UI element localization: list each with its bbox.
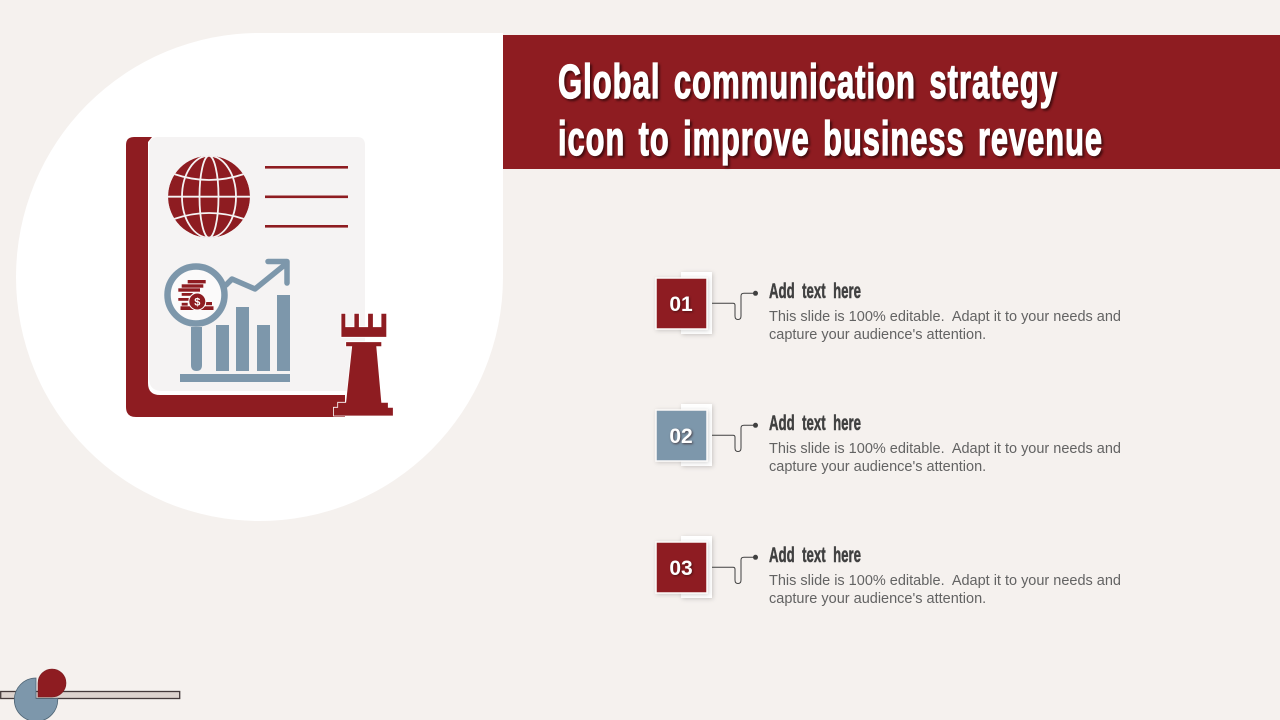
text 01: Add text here: [769, 280, 861, 303]
list item 01: [656, 272, 1121, 343]
number badge 02: 02: [669, 425, 693, 448]
number badge 03: [656, 536, 712, 598]
list item 03: [656, 536, 1121, 607]
text 02: [769, 412, 1121, 475]
connector 02: [712, 423, 758, 452]
text 01: This slide is 100% editable. Adapt it to your needs and: [769, 309, 1121, 325]
text 02: capture your audience's attention.: [769, 459, 986, 475]
text 03: [769, 544, 1121, 607]
list item 02: [656, 404, 1121, 475]
icon: magnifier with coins: $: [194, 296, 200, 308]
number badge 02: [656, 404, 712, 466]
text lines: [265, 166, 348, 228]
icon: rook chess piece: [334, 313, 393, 416]
page: [149, 137, 365, 391]
text 01: capture your audience's attention.: [769, 327, 986, 343]
text 02: Add text here: [769, 412, 861, 435]
title: [558, 56, 1103, 166]
text 03: Add text here: [769, 544, 861, 567]
text 01: [769, 280, 1121, 343]
connector 03: [712, 555, 758, 584]
text 03: capture your audience's attention.: [769, 591, 986, 607]
text 02: This slide is 100% editable. Adapt it to your needs and: [769, 441, 1121, 457]
number badge 01: 01: [669, 293, 693, 316]
number badge 01: [656, 272, 712, 334]
title banner: [503, 35, 1280, 169]
book cover: [126, 137, 345, 417]
icon: globe: [168, 156, 250, 238]
decorative corner motif: bar, pie and teardrop: [1, 669, 180, 720]
icon: report book with globe, chart and rook: [126, 137, 393, 417]
number badge 03: 03: [669, 557, 693, 580]
bar chart with growth arrow: [180, 262, 290, 382]
text 03: This slide is 100% editable. Adapt it to your needs and: [769, 573, 1121, 589]
white teardrop background panel: [16, 33, 503, 521]
icon: magnifier with coins: [168, 266, 224, 371]
connector 01: [712, 291, 758, 320]
